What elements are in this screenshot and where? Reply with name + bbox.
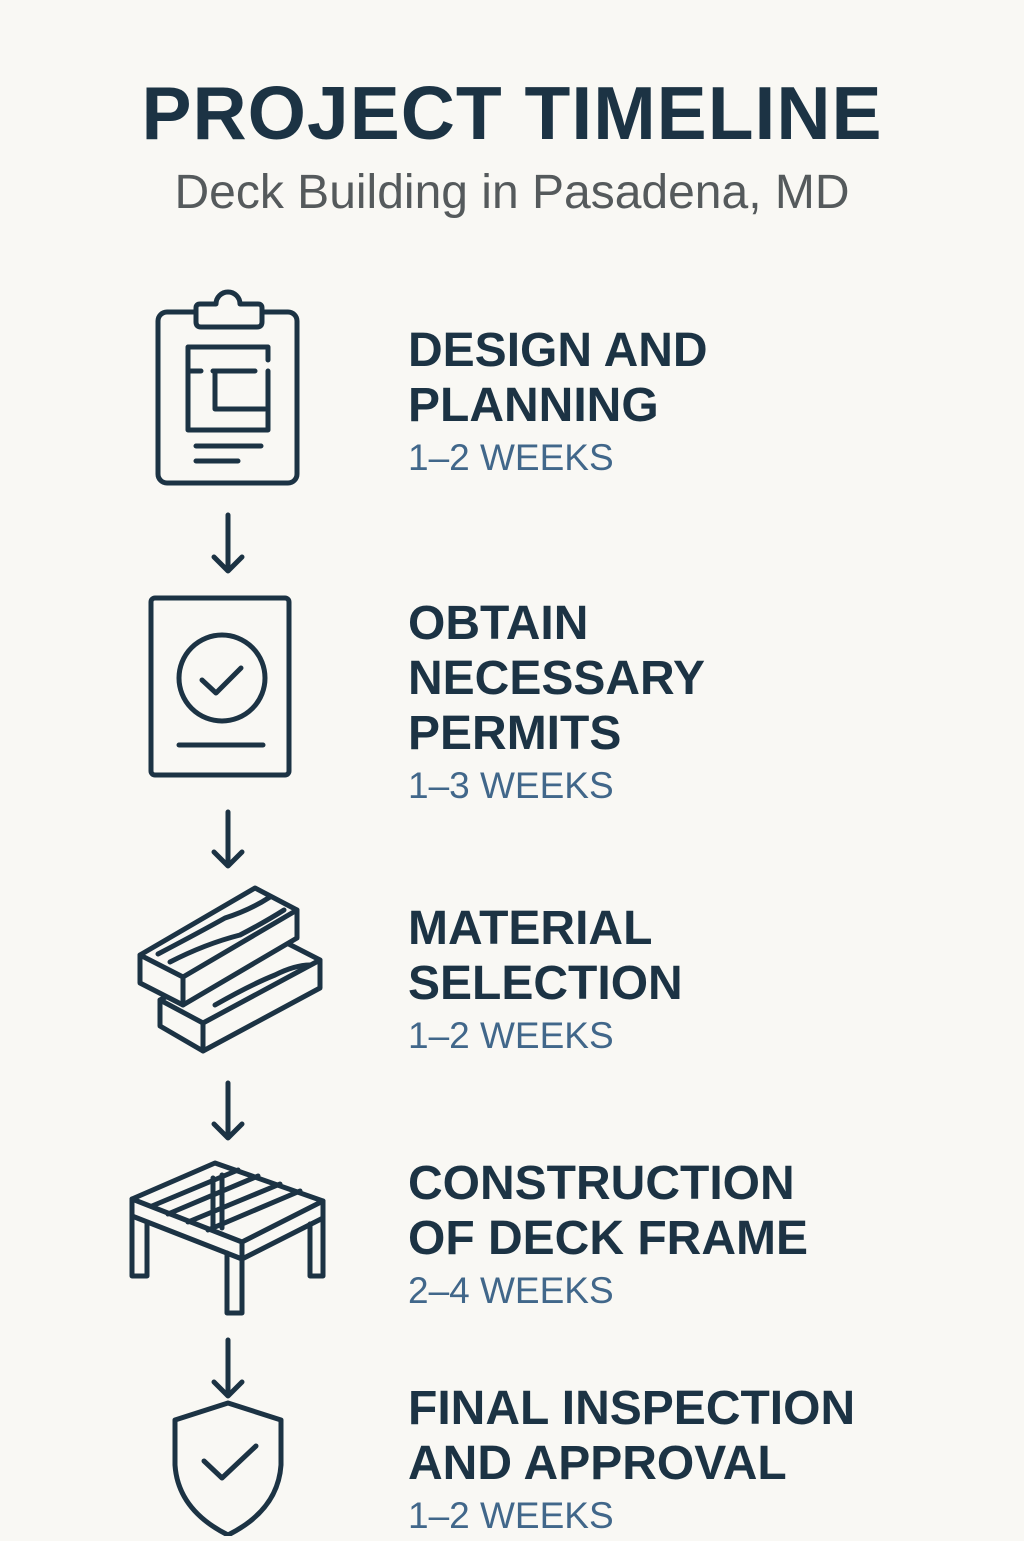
step 4: construction: 2–4 WEEKS <box>408 1270 614 1311</box>
title: PROJECT TIMELINE <box>141 71 883 155</box>
arrow 1 <box>214 515 242 571</box>
step 1: design and planning <box>408 324 708 478</box>
icon: clipboard design plan <box>158 292 297 483</box>
step 5: final inspection: AND APPROVAL <box>408 1437 787 1490</box>
subtitle: Deck Building in Pasadena, MD <box>174 166 850 219</box>
step 4: construction <box>408 1157 808 1311</box>
icon: permit document <box>151 598 289 775</box>
arrow 4 <box>214 1340 242 1396</box>
step 2: permits: PERMITS <box>408 707 621 760</box>
step 4: construction: CONSTRUCTION <box>408 1157 795 1210</box>
step 3: material selection <box>408 902 683 1056</box>
step 4: construction: OF DECK FRAME <box>408 1212 808 1265</box>
icon: deck frame <box>132 1163 323 1313</box>
step 1: design and planning: DESIGN AND <box>408 324 708 377</box>
step 2: permits: NECESSARY <box>408 652 705 705</box>
step 3: material selection: MATERIAL <box>408 902 652 955</box>
icon: lumber boards <box>140 888 320 1051</box>
arrow 2 <box>214 812 242 866</box>
step 2: permits: 1–3 WEEKS <box>408 765 614 806</box>
step 3: material selection: 1–2 WEEKS <box>408 1015 614 1056</box>
step 2: permits: OBTAIN <box>408 597 588 650</box>
icon: shield check <box>175 1403 281 1535</box>
step 5: final inspection: FINAL INSPECTION <box>408 1382 855 1435</box>
step 5: final inspection <box>408 1382 855 1536</box>
step 1: design and planning: 1–2 WEEKS <box>408 437 614 478</box>
step 3: material selection: SELECTION <box>408 957 683 1010</box>
step 1: design and planning: PLANNING <box>408 379 659 432</box>
step 5: final inspection: 1–2 WEEKS <box>408 1495 614 1536</box>
step 2: permits <box>408 597 705 806</box>
arrow 3 <box>214 1083 242 1138</box>
